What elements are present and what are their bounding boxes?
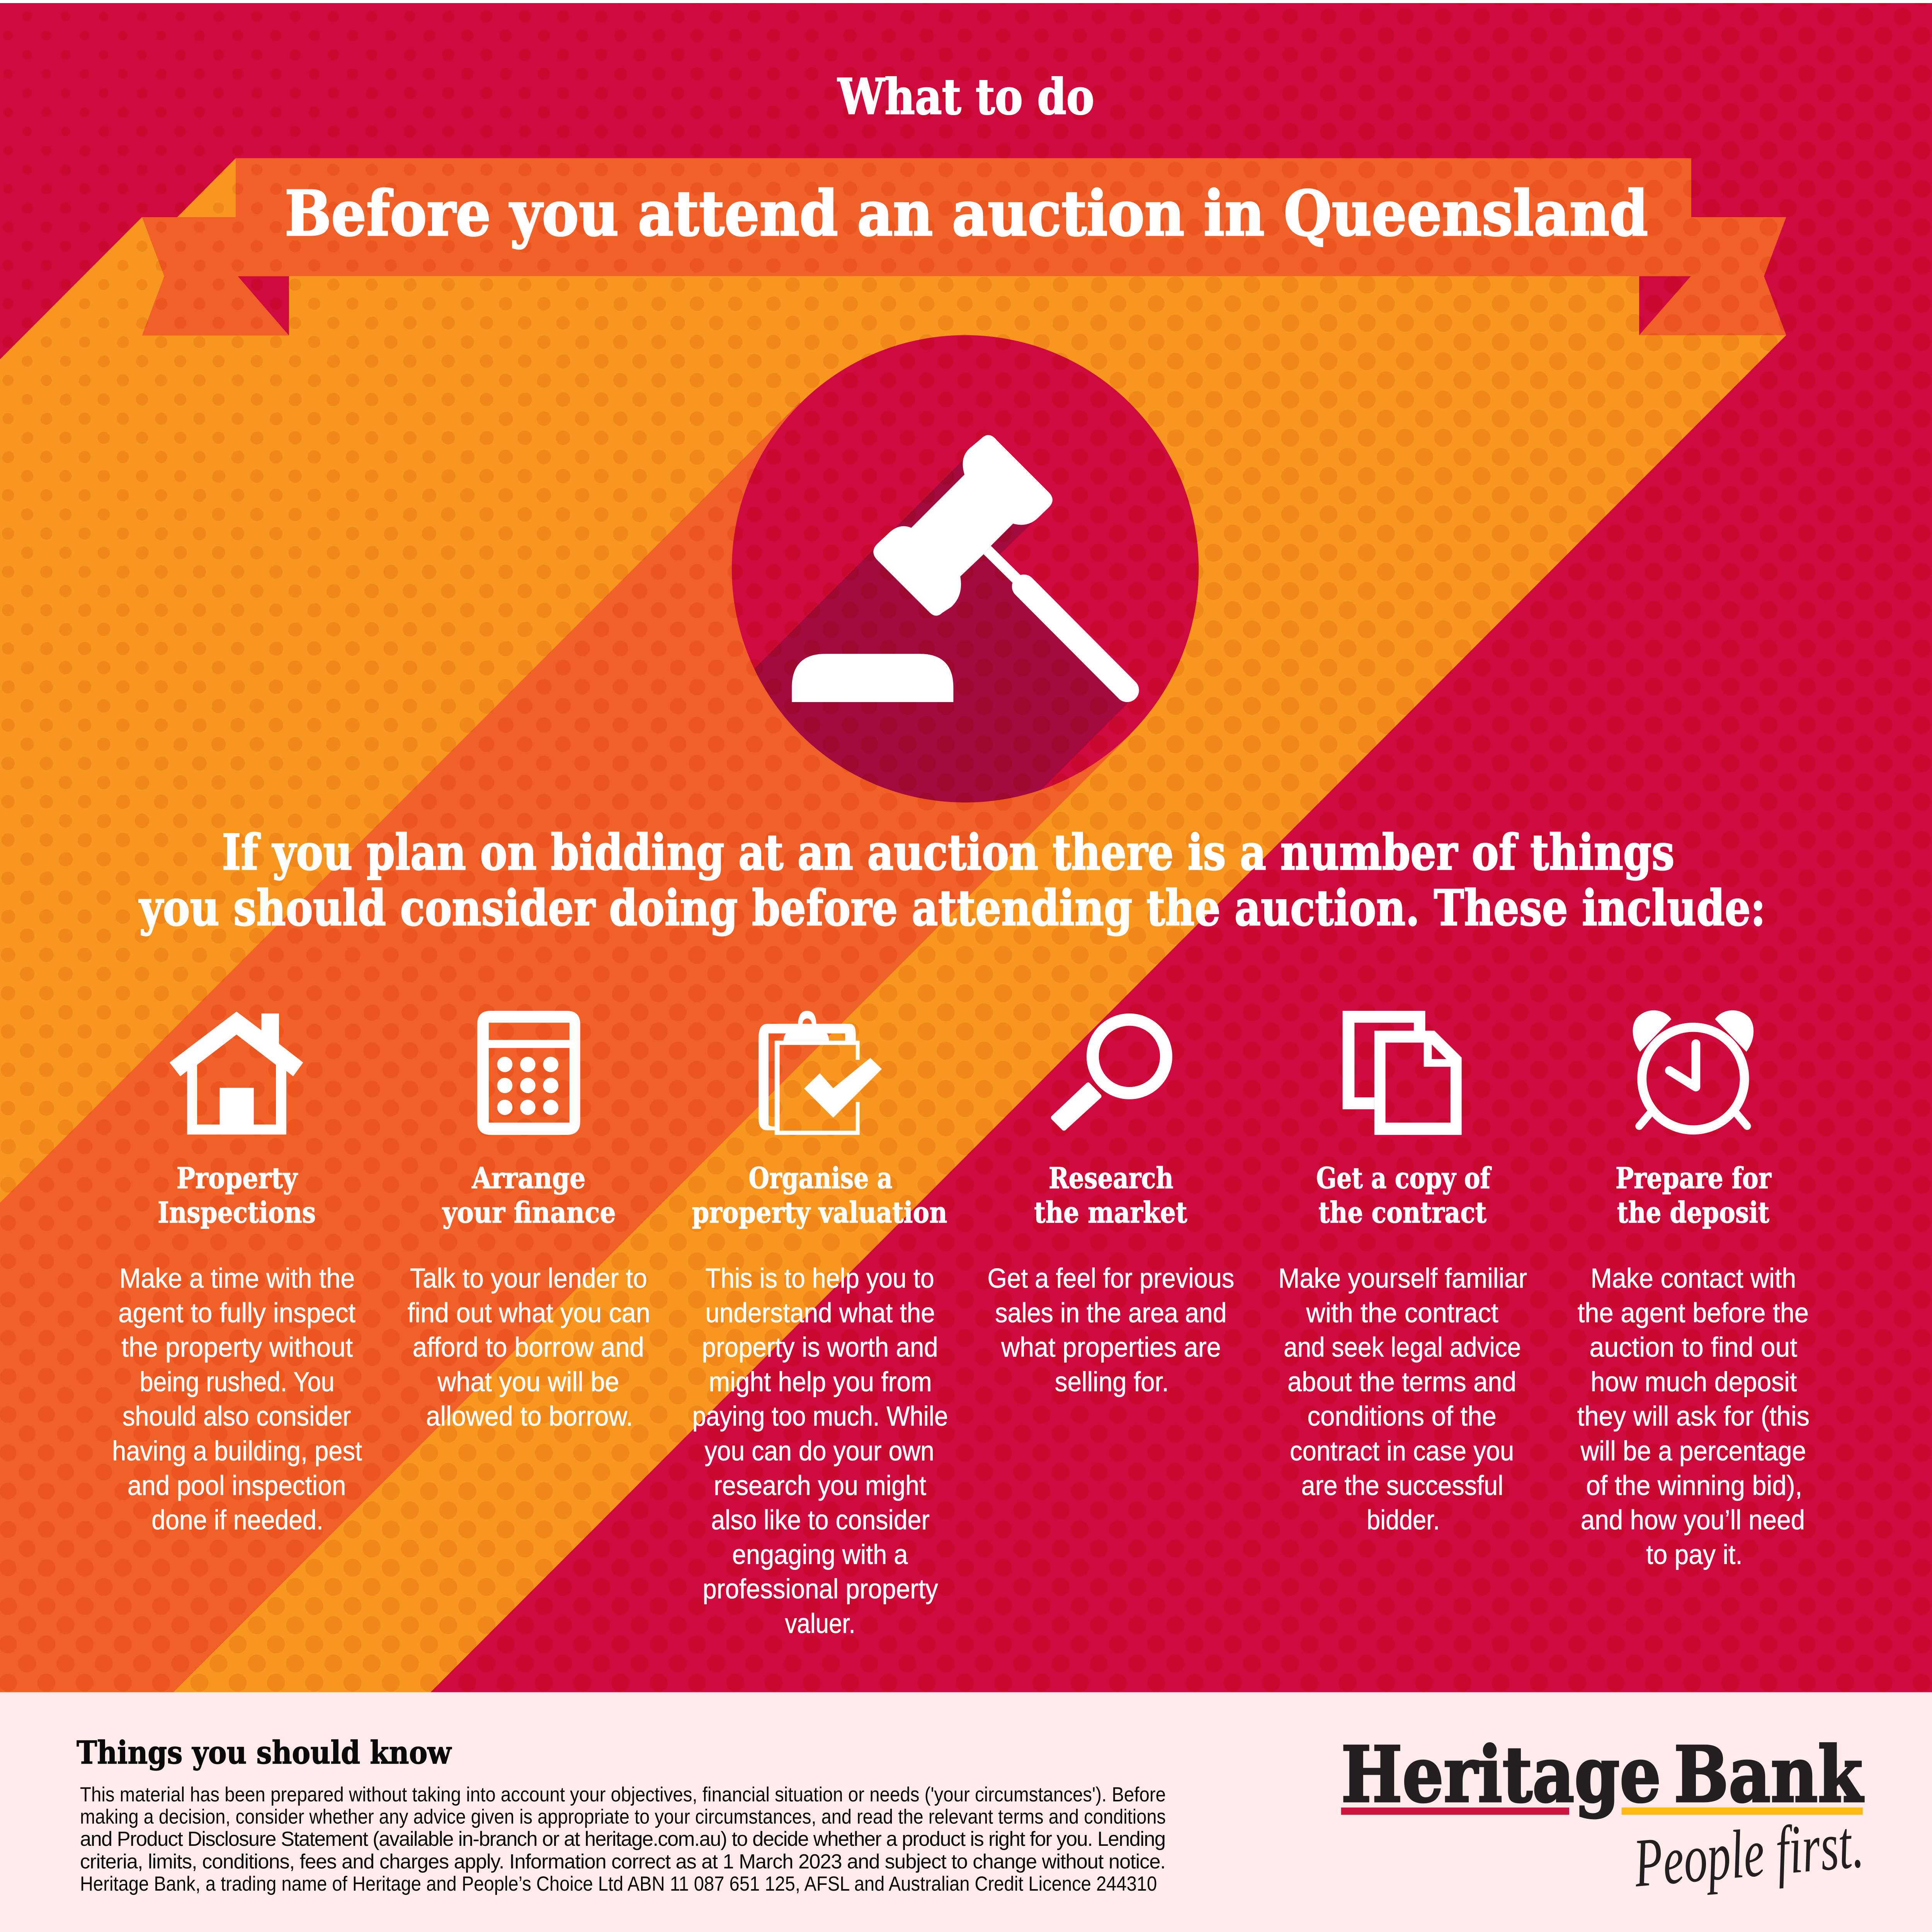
panel: research the market xyxy=(987,1020,1234,1397)
text: organise a property valuation: paying too much. While xyxy=(692,1401,948,1432)
kicker heading: What to do xyxy=(837,68,1094,125)
text: arrange your finance xyxy=(408,1263,650,1432)
text: research the market xyxy=(987,1263,1234,1397)
text: organise a property valuation xyxy=(692,1263,948,1639)
text: arrange your finance: Talk to your lender to xyxy=(410,1263,647,1294)
heading: research the market: the market xyxy=(1034,1195,1187,1230)
text: disclaimer xyxy=(80,1783,1166,1895)
icon: calculator xyxy=(477,1011,580,1135)
text: prepare for the deposit: and how you’ll need xyxy=(1581,1505,1805,1536)
text: prepare for the deposit: they will ask for (this xyxy=(1577,1401,1810,1432)
heading: research the market xyxy=(1034,1161,1187,1230)
icon: house xyxy=(170,1012,303,1134)
text: arrange your finance: what you will be xyxy=(437,1366,619,1397)
panel: get a copy of the contract xyxy=(1278,1011,1527,1536)
text: arrange your finance: afford to borrow and xyxy=(413,1332,644,1363)
title: Before you attend an auction in Queensland xyxy=(285,177,1648,250)
heading: research the market: Research xyxy=(1049,1161,1173,1195)
text: disclaimer: and Product Disclosure Statement (available in-branch or at heritage.com.au) to decide whether a product is right for you. Lending xyxy=(80,1828,1166,1850)
heading: property inspections: Inspections xyxy=(158,1195,316,1230)
icon: alarm clock xyxy=(1633,1010,1753,1130)
icon: magnifying glass xyxy=(1053,1020,1166,1128)
intro text block: If you plan on bidding at an auction there is a number of things xyxy=(222,823,1674,881)
medallion circle with gavel shadow xyxy=(732,335,1199,803)
icon: clipboard with check mark xyxy=(759,1011,882,1135)
text: disclaimer: This material has been prepared without taking into account your objectives, financial situation or needs ('your circumstances'). Before xyxy=(80,1783,1166,1806)
heading: get a copy of the contract: the contract xyxy=(1318,1195,1486,1230)
panel: arrange your finance xyxy=(408,1011,650,1432)
text: get a copy of the contract: Make yourself familiar xyxy=(1278,1263,1527,1294)
text: organise a property valuation: professional property xyxy=(703,1574,938,1605)
heading: organise a property valuation xyxy=(692,1161,947,1230)
heading: prepare for the deposit xyxy=(1616,1161,1772,1230)
intro text block xyxy=(139,823,1765,937)
ribbon banner xyxy=(142,158,1786,335)
panel: property inspections xyxy=(112,1012,362,1536)
panel: prepare for the deposit xyxy=(1577,1010,1810,1570)
panel: footer xyxy=(0,1692,1932,1932)
text: property inspections: the property without xyxy=(121,1332,353,1363)
text: disclaimer: criteria, limits, conditions, fees and charges apply. Information correct as at 1 March 2023 and subject to change without notice. xyxy=(80,1850,1166,1873)
text: organise a property valuation: property is worth and xyxy=(702,1332,938,1363)
heading: organise a property valuation: Organise a xyxy=(748,1161,893,1195)
text: organise a property valuation: engaging with a xyxy=(732,1539,908,1570)
text: disclaimer: Heritage Bank, a trading name of Heritage and People’s Choice Ltd ABN 11 087 651 125, AFSL and Australian Credit Licence 244310 xyxy=(80,1872,1157,1895)
text: organise a property valuation: This is to help you to xyxy=(705,1263,934,1294)
heading: prepare for the deposit: the deposit xyxy=(1617,1195,1769,1230)
text: get a copy of the contract: about the terms and xyxy=(1287,1366,1516,1397)
text: prepare for the deposit xyxy=(1577,1263,1810,1570)
text: prepare for the deposit: to pay it. xyxy=(1646,1539,1743,1570)
text: research the market: what properties are xyxy=(1001,1332,1221,1363)
panel: organise a property valuation xyxy=(692,1011,948,1639)
heading: arrange your finance: your finance xyxy=(442,1195,616,1230)
text: prepare for the deposit: auction to find out xyxy=(1590,1332,1798,1363)
text: prepare for the deposit: Make contact with xyxy=(1590,1263,1796,1294)
text: property inspections: done if needed. xyxy=(151,1505,323,1536)
text: organise a property valuation: understand what the xyxy=(705,1298,935,1328)
heading: arrange your finance: Arrange xyxy=(471,1161,585,1195)
text: get a copy of the contract: bidder. xyxy=(1367,1505,1440,1536)
heading: get a copy of the contract: Get a copy of xyxy=(1316,1161,1492,1195)
text: prepare for the deposit: of the winning bid), xyxy=(1586,1470,1802,1501)
text: organise a property valuation: also like to consider xyxy=(711,1505,930,1536)
text: arrange your finance: find out what you can xyxy=(408,1298,650,1328)
text: prepare for the deposit: will be a percentage xyxy=(1580,1436,1806,1467)
heading: property inspections xyxy=(158,1161,316,1230)
text: property inspections: agent to fully inspect xyxy=(118,1298,355,1328)
heading: get a copy of the contract xyxy=(1316,1161,1492,1230)
text: get a copy of the contract: and seek legal advice xyxy=(1284,1332,1521,1363)
text: get a copy of the contract: contract in case you xyxy=(1290,1436,1514,1467)
icon: gavel and sound block xyxy=(792,435,1127,702)
text: get a copy of the contract: are the successful xyxy=(1301,1470,1503,1501)
text: arrange your finance: allowed to borrow. xyxy=(426,1401,633,1432)
icon: documents xyxy=(1343,1011,1462,1135)
text: prepare for the deposit: how much deposit xyxy=(1590,1366,1797,1397)
text: research the market: sales in the area and xyxy=(995,1298,1227,1328)
heading: property inspections: Property xyxy=(177,1161,298,1195)
heading: arrange your finance xyxy=(442,1161,616,1230)
text: property inspections: being rushed. You xyxy=(140,1366,335,1397)
text: organise a property valuation: research you might xyxy=(714,1470,926,1501)
text: disclaimer: making a decision, consider whether any advice given is appropriate to your circumstances, and read the relevant terms and conditions xyxy=(80,1805,1166,1828)
text: research the market: selling for. xyxy=(1055,1366,1169,1397)
heading: prepare for the deposit: Prepare for xyxy=(1616,1161,1772,1195)
text: property inspections: and pool inspection xyxy=(128,1470,346,1501)
text: organise a property valuation: valuer. xyxy=(785,1608,855,1639)
heading: organise a property valuation: property valuation xyxy=(692,1195,947,1230)
text: research the market: Get a feel for previous xyxy=(987,1263,1234,1294)
logo: Heritage Bank xyxy=(1341,1730,1866,1901)
text: property inspections xyxy=(112,1263,362,1536)
text: property inspections: having a building, pest xyxy=(112,1436,362,1467)
text: property inspections: Make a time with the xyxy=(119,1263,355,1294)
text: organise a property valuation: might help you from xyxy=(709,1366,932,1397)
text: prepare for the deposit: the agent before the xyxy=(1578,1298,1809,1328)
heading: things you should know: Things you should know xyxy=(77,1735,452,1771)
text: get a copy of the contract: with the contract xyxy=(1306,1298,1498,1328)
text: get a copy of the contract: conditions of the xyxy=(1308,1401,1497,1432)
text: property inspections: should also consider xyxy=(122,1401,351,1432)
text: organise a property valuation: you can do your own xyxy=(704,1436,934,1467)
text: get a copy of the contract xyxy=(1278,1263,1527,1536)
